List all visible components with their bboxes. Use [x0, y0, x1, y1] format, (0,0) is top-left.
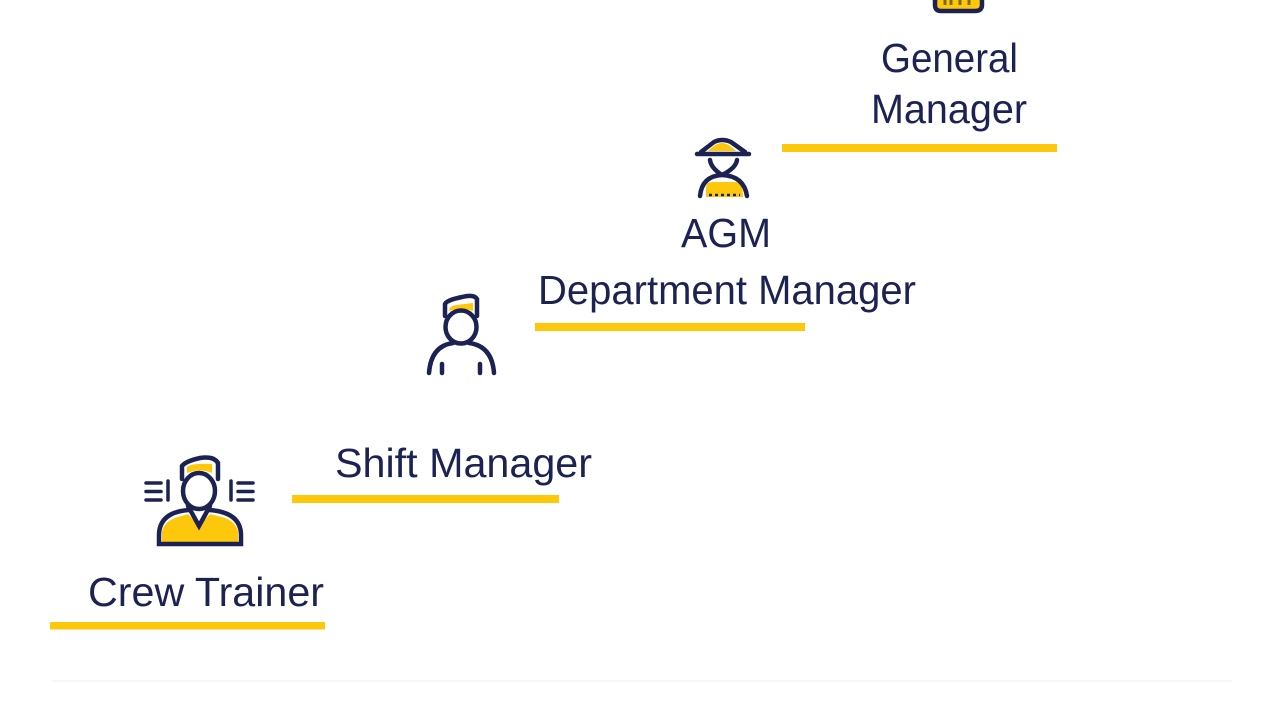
step: AGM / Department Manager — [535, 140, 916, 331]
step: Crew Trainer — [50, 458, 325, 630]
label: AGM / Department Manager — [538, 210, 916, 313]
icon: General Manager badge (cropped at top) — [935, 0, 982, 11]
step: General Manager — [782, 0, 1057, 152]
underline: General Manager — [782, 144, 1057, 152]
underline: Crew Trainer — [50, 622, 325, 630]
underline: Shift Manager — [292, 495, 559, 503]
label: Crew Trainer: Crew Trainer — [88, 569, 324, 615]
label: General Manager: Manager — [871, 86, 1027, 132]
step: Shift Manager — [292, 296, 592, 503]
underline: Department Manager — [535, 323, 805, 331]
label: General Manager — [871, 35, 1027, 132]
label: AGM / Department Manager: AGM — [681, 210, 771, 256]
label: Shift Manager: Shift Manager — [335, 440, 592, 486]
icon: Crew Trainer person with lists — [146, 458, 253, 544]
icon: Shift Manager person with cap — [429, 296, 494, 373]
icon: AGM with wide hat — [697, 140, 749, 197]
label: AGM / Department Manager: Department Manager — [538, 267, 916, 313]
label: General Manager: General — [881, 35, 1018, 81]
